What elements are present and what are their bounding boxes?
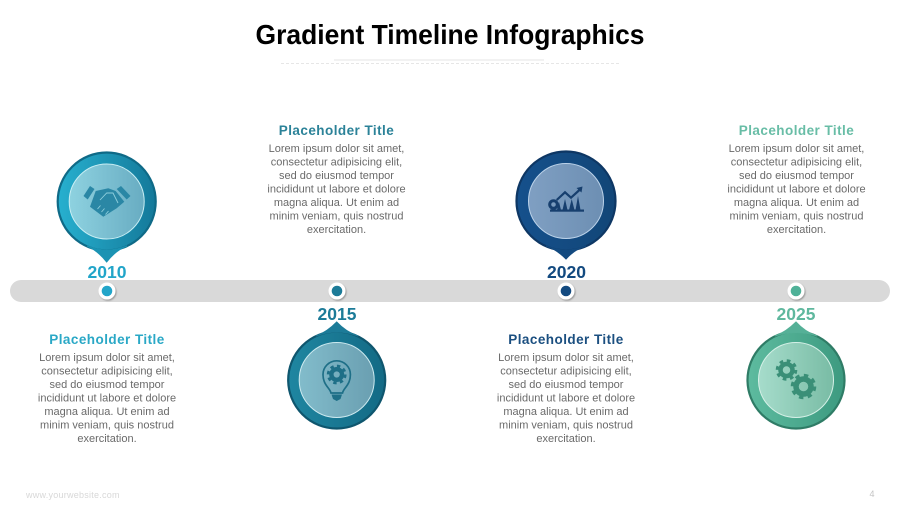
text block: 2015: minim veniam, quis nostrud [270, 210, 403, 222]
text block: 2020: exercitation. [536, 433, 596, 445]
marker: 2020 [558, 282, 574, 300]
text block: 2010: sed do eiusmod tempor [50, 379, 165, 391]
heading: 2010: Placeholder Title [49, 332, 165, 347]
icon: handshake [84, 186, 130, 217]
text block: 2010: exercitation. [77, 433, 137, 445]
icon: light bulb with gear [323, 361, 350, 401]
marker: 2010 [98, 282, 116, 300]
text block: 2020: incididunt ut labore et dolore [497, 392, 635, 404]
text block: 2010: Lorem ipsum dolor sit amet, [39, 352, 175, 364]
heading: 2020: Placeholder Title [508, 332, 624, 347]
text block: 2020 [497, 332, 635, 445]
text block: 2025: magna aliqua. Ut enim ad [734, 197, 859, 209]
text block: 2025: sed do eiusmod tempor [739, 170, 854, 182]
pin: 2010 [58, 152, 156, 262]
text block: 2015 [267, 123, 406, 236]
text block: 2015: Lorem ipsum dolor sit amet, [269, 143, 404, 155]
timeline bar [10, 280, 890, 302]
text block: 2015: exercitation. [307, 224, 366, 236]
icon: growth chart [550, 186, 584, 212]
text block: 2020: minim veniam, quis nostrud [499, 420, 633, 432]
pin: 2015 [288, 322, 385, 428]
year: 2025: 2025 [777, 304, 816, 324]
heading: 2015: Placeholder Title [279, 123, 394, 138]
footer: website: www.yourwebsite.com [25, 490, 120, 500]
year: 2020: 2020 [547, 262, 586, 282]
text block: 2010 [38, 332, 176, 445]
text block: 2015: incididunt ut labore et dolore [267, 184, 406, 196]
text block: 2020: consectetur adipisicing elit, [500, 366, 632, 378]
heading: 2025: Placeholder Title [739, 123, 854, 138]
pin: 2025 [748, 322, 844, 428]
year: 2010: 2010 [88, 262, 127, 282]
marker: 2025 [788, 282, 804, 300]
text block: 2025: minim veniam, quis nostrud [730, 210, 863, 222]
text block: 2015: magna aliqua. Ut enim ad [274, 197, 399, 209]
text block: 2025: consectetur adipisicing elit, [731, 156, 862, 168]
text block: 2010: magna aliqua. Ut enim ad [44, 406, 170, 418]
text block: 2015: consectetur adipisicing elit, [271, 156, 402, 168]
text block: 2010: consectetur adipisicing elit, [41, 366, 173, 378]
year: 2015: 2015 [318, 304, 357, 324]
marker: 2015 [328, 282, 346, 300]
icon circle: 2015 [299, 342, 374, 418]
text block: 2020: magna aliqua. Ut enim ad [503, 406, 629, 418]
text block: 2010: minim veniam, quis nostrud [40, 420, 174, 432]
footer: page number: 4 [870, 489, 875, 499]
text block: 2025: exercitation. [767, 224, 826, 236]
title: Gradient Timeline Infographics [256, 19, 644, 50]
text block: 2010: incididunt ut labore et dolore [38, 392, 176, 404]
icon circle: 2010 [69, 164, 144, 239]
text block: 2015: sed do eiusmod tempor [279, 170, 394, 182]
text block: 2025: incididunt ut labore et dolore [727, 184, 866, 196]
icon: gears [777, 361, 815, 398]
text block: 2025 [727, 123, 866, 236]
text block: 2020: Lorem ipsum dolor sit amet, [498, 352, 634, 364]
text block: 2025: Lorem ipsum dolor sit amet, [729, 143, 864, 155]
text block: 2020: sed do eiusmod tempor [509, 379, 624, 391]
pin: 2020 [516, 152, 616, 259]
icon circle: 2025 [758, 342, 834, 418]
icon circle: 2020 [528, 164, 604, 238]
